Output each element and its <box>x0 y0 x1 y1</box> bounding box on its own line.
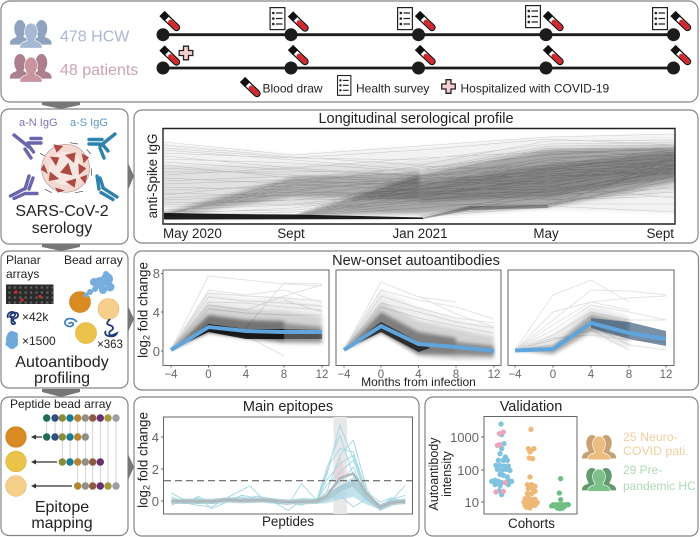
arrow: to main epitopes <box>128 454 134 480</box>
text: SARS-CoV-2 serology <box>15 203 109 237</box>
text: autoantibody profiling <box>15 354 109 387</box>
x axis ticks: 12 <box>660 369 672 381</box>
icon: beads with antigens <box>65 271 119 344</box>
label: planar arrays: arrays <box>6 267 39 281</box>
chart: autoantibody group 1 <box>163 270 329 366</box>
y axis ticks: 10 <box>465 495 479 510</box>
panel: new-onset autoantibodies <box>134 251 698 390</box>
y axis label: fold change <box>136 412 150 485</box>
x axis label: Months from infection <box>361 375 476 389</box>
x axis labels: May 2020 <box>163 226 222 241</box>
y axis ticks: 0 <box>152 494 159 509</box>
y axis label: log <box>136 490 150 508</box>
icon: healthcare workers <box>10 20 52 48</box>
x axis labels: Jan 2021 <box>392 226 448 241</box>
y axis ticks: 2 <box>152 462 159 477</box>
text: autoantibody profiling: Autoantibody <box>15 354 109 371</box>
title: Validation <box>500 399 562 415</box>
arrow: to new-onset autoantibodies <box>128 306 134 332</box>
icon: planar array chip <box>6 284 54 304</box>
panel: cohort and sampling timeline <box>1 1 698 102</box>
text: SARS-CoV-2 serology: serology <box>32 220 92 237</box>
icon: protein <box>6 331 18 349</box>
x axis ticks: 8 <box>281 369 287 381</box>
x axis ticks: −4 <box>337 369 351 381</box>
x axis ticks <box>164 366 672 381</box>
dots: cohort 3 <box>549 476 571 511</box>
timeline: patients <box>156 46 688 74</box>
label: ×42k: ×42k <box>22 310 49 324</box>
icon: antibodies <box>10 134 117 200</box>
x axis label: Peptides <box>262 514 314 529</box>
y axis ticks <box>152 430 163 509</box>
chart: autoantibody group 3 <box>508 270 674 366</box>
dots: cohort 1 <box>489 421 514 497</box>
text: epitope mapping: Epitope <box>35 499 89 516</box>
y axis ticks: 1000 <box>450 430 479 445</box>
legend: Neuro-COVID patients <box>582 430 689 460</box>
label: ×363: ×363 <box>97 339 123 351</box>
icon: patients <box>10 54 52 82</box>
panel: longitudinal serological profile <box>134 110 698 243</box>
x axis ticks: −4 <box>508 369 522 381</box>
x axis ticks: 4 <box>588 369 595 381</box>
y axis label: Autoantibody <box>427 437 441 510</box>
x axis labels: Sept <box>277 226 305 241</box>
x axis ticks: 4 <box>243 369 250 381</box>
text: autoantibody profiling: profiling <box>34 370 90 387</box>
legend: pre-pandemic healthy controls <box>582 463 696 493</box>
chart: autoantibody group 2 <box>336 270 501 366</box>
y axis ticks: 8 <box>153 266 160 281</box>
x axis label: Cohorts <box>508 516 555 531</box>
x axis labels: May <box>533 226 559 241</box>
line chart: epitope peptides <box>164 417 412 514</box>
timeline: healthcare workers <box>156 6 688 41</box>
x axis ticks: 0 <box>205 369 212 381</box>
arrow: down to epitope mapping <box>42 389 80 397</box>
title: New-onset autoantibodies <box>332 253 500 269</box>
y axis label: anti-Spike IgG <box>145 134 160 218</box>
line chart: anti-Spike IgG <box>150 128 690 224</box>
y axis label: 2 <box>142 335 152 340</box>
legend: Health survey <box>356 82 429 96</box>
y axis label: intensity <box>440 450 454 497</box>
label: a-N IgG: a-N IgG <box>19 117 58 129</box>
label: 478 HCW: 478 HCW <box>60 28 130 46</box>
label: peptide bead array: Peptide bead array <box>10 397 111 411</box>
text: epitope mapping: mapping <box>31 515 93 532</box>
arrow: down to autoantibody profiling <box>42 244 80 251</box>
x axis ticks: 0 <box>550 369 556 381</box>
x axis ticks: 12 <box>316 369 328 381</box>
y axis ticks <box>450 430 484 510</box>
legend: Neuro-COVID patients: COVID pati. <box>623 444 689 458</box>
y axis label: fold change <box>136 262 150 335</box>
title: Main epitopes <box>243 399 333 415</box>
y axis label: 2 <box>142 485 152 490</box>
label: 48 patients: 48 patients <box>60 62 138 79</box>
x axis ticks: 8 <box>626 369 632 381</box>
x axis ticks: −4 <box>164 369 178 381</box>
x axis ticks: 8 <box>453 369 459 381</box>
label: planar arrays: Planar <box>6 253 41 267</box>
legend: pre-pandemic healthy controls: pandemic HC <box>623 479 696 493</box>
x axis ticks: 12 <box>488 369 500 381</box>
y axis label: log <box>136 340 150 358</box>
text: SARS-CoV-2 serology: SARS-CoV-2 <box>15 203 109 220</box>
beeswarm chart <box>484 416 577 514</box>
x axis ticks: 0 <box>378 369 384 381</box>
x axis ticks: 4 <box>415 369 422 381</box>
y axis ticks: 0 <box>153 344 160 359</box>
label: bead array: Bead array <box>64 253 123 267</box>
legend: pre-pandemic healthy controls: 29 Pre- <box>623 463 662 477</box>
legend: Hospitalized with COVID-19 <box>460 82 610 96</box>
dots: cohort 2 <box>521 427 540 511</box>
legend <box>242 76 610 96</box>
arrow: to longitudinal profile <box>128 163 134 190</box>
icon: peptide <box>8 312 18 324</box>
label: a-S IgG: a-S IgG <box>70 117 108 129</box>
panel: autoantibody profiling <box>1 251 128 388</box>
y axis ticks: 100 <box>457 463 479 478</box>
text: epitope mapping <box>31 499 93 532</box>
panel: validation <box>425 397 698 536</box>
y axis ticks <box>153 266 163 359</box>
y axis ticks: 4 <box>152 430 159 445</box>
icon: virus <box>40 143 92 193</box>
y axis label <box>427 437 454 510</box>
x axis labels <box>163 226 674 241</box>
panel: SARS-CoV-2 serology <box>1 109 128 244</box>
arrow: down to serology <box>42 102 80 109</box>
panel: epitope mapping <box>1 397 128 536</box>
legend: Neuro-COVID patients: 25 Neuro- <box>623 430 678 444</box>
panel: main epitopes <box>134 397 419 536</box>
label: ×1500: ×1500 <box>22 334 56 348</box>
legend: Blood draw <box>262 82 323 96</box>
label: planar arrays <box>6 253 41 281</box>
title: Longitudinal serological profile <box>318 111 514 127</box>
diagram: peptide bead array <box>6 414 120 496</box>
y axis ticks: 4 <box>153 305 160 320</box>
x axis labels: Sept <box>646 226 674 241</box>
